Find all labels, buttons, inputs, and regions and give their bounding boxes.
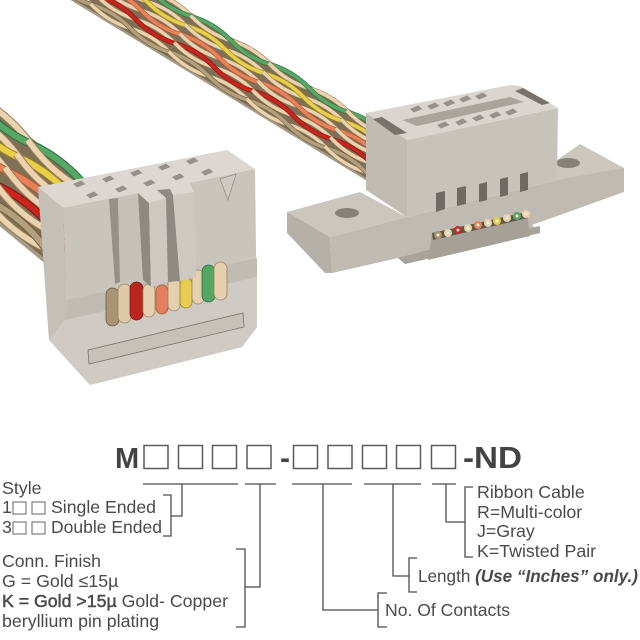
connector finish legend <box>2 551 228 631</box>
connector front face <box>49 169 257 385</box>
ribbon cable legend: J=Gray <box>477 521 535 541</box>
second code boxes <box>294 446 456 468</box>
connector finish legend: K = Gold >15µ Gold- Copper <box>2 591 228 611</box>
front window slots <box>436 172 528 212</box>
lower bevel <box>49 277 257 385</box>
prefix M: M <box>115 443 139 475</box>
ribbon cable legend: R=Multi-color <box>477 502 582 522</box>
left connector <box>38 150 257 385</box>
flange <box>287 144 624 273</box>
style legend <box>2 478 162 537</box>
underlines and leader lines <box>143 484 473 627</box>
label plate <box>88 313 244 364</box>
style legend: Style <box>2 478 42 498</box>
length legend: Length (Use “Inches” only.) <box>418 566 638 586</box>
connector finish legend: Conn. Finish <box>2 551 101 571</box>
wire rings <box>106 262 227 326</box>
connector top face <box>38 150 255 208</box>
connector body <box>366 85 558 217</box>
first code boxes <box>144 446 271 468</box>
right connector <box>287 85 624 273</box>
style legend: Single Ended <box>51 497 156 517</box>
style legend: Double Ended <box>51 517 162 537</box>
top slots and contact holes <box>373 88 550 135</box>
suffix ND: -ND <box>463 440 522 475</box>
ring recess band <box>65 258 257 320</box>
style legend: 1 <box>2 497 12 517</box>
ribbon cable: right connector <box>9 0 429 202</box>
dash: - <box>280 442 290 475</box>
contacts legend: No. Of Contacts <box>385 600 510 620</box>
cable end with coloured pins <box>428 210 530 260</box>
top contact holes <box>73 158 214 198</box>
connector side face <box>38 187 67 340</box>
ribbon cable legend <box>477 482 596 561</box>
part number title <box>115 440 522 475</box>
orientation triangle <box>220 174 236 200</box>
style legend: 3 <box>2 517 12 537</box>
connector finish legend: beryllium pin plating <box>2 611 159 631</box>
ribbon cable: left connector <box>0 0 155 308</box>
latch posts <box>109 183 196 287</box>
ribbon cable legend: Ribbon Cable <box>477 482 585 502</box>
connector finish legend: G = Gold ≤15µ <box>2 571 118 591</box>
ribbon cable legend: K=Twisted Pair <box>477 541 596 561</box>
